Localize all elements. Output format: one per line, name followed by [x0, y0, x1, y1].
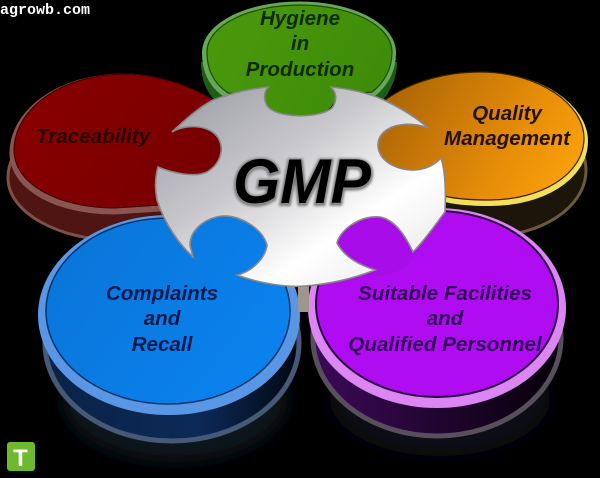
label: Suitable Facilities and Qualified Personnel: and [427, 307, 464, 330]
icon: T badge [7, 442, 35, 472]
label: Complaints and Recall: and [144, 307, 181, 330]
label: Quality Management: Management [444, 127, 571, 150]
disc: Hygiene in Production [201, 5, 397, 118]
label: Complaints and Recall: Recall [132, 333, 194, 356]
label: Suitable Facilities and Qualified Personnel: Qualified Personnel [348, 333, 543, 356]
center piece side edge [298, 282, 309, 312]
disc: Quality Management [373, 72, 586, 236]
disc: Complaints and Recall [38, 213, 300, 441]
title: GMP: GMP [233, 147, 372, 217]
label: Quality Management: Quality [472, 102, 543, 125]
title: GMP: GMP [233, 148, 372, 218]
icon: T badge: T [13, 445, 28, 472]
center puzzle piece [156, 87, 445, 286]
label: Suitable Facilities and Qualified Personnel: Suitable Facilities [358, 282, 532, 305]
label: Traceability: Traceability [36, 125, 152, 148]
disc: Traceability [8, 74, 227, 240]
disc: Suitable Facilities and Qualified Personnel [308, 208, 566, 436]
label: Hygiene in Production: Production [246, 58, 354, 81]
label: Hygiene in Production: Hygiene [260, 7, 340, 30]
label: Hygiene in Production: in [291, 32, 309, 55]
reflections under discs [63, 338, 550, 462]
watermark: agrowb.com [0, 2, 90, 19]
label: Complaints and Recall: Complaints [106, 282, 218, 305]
